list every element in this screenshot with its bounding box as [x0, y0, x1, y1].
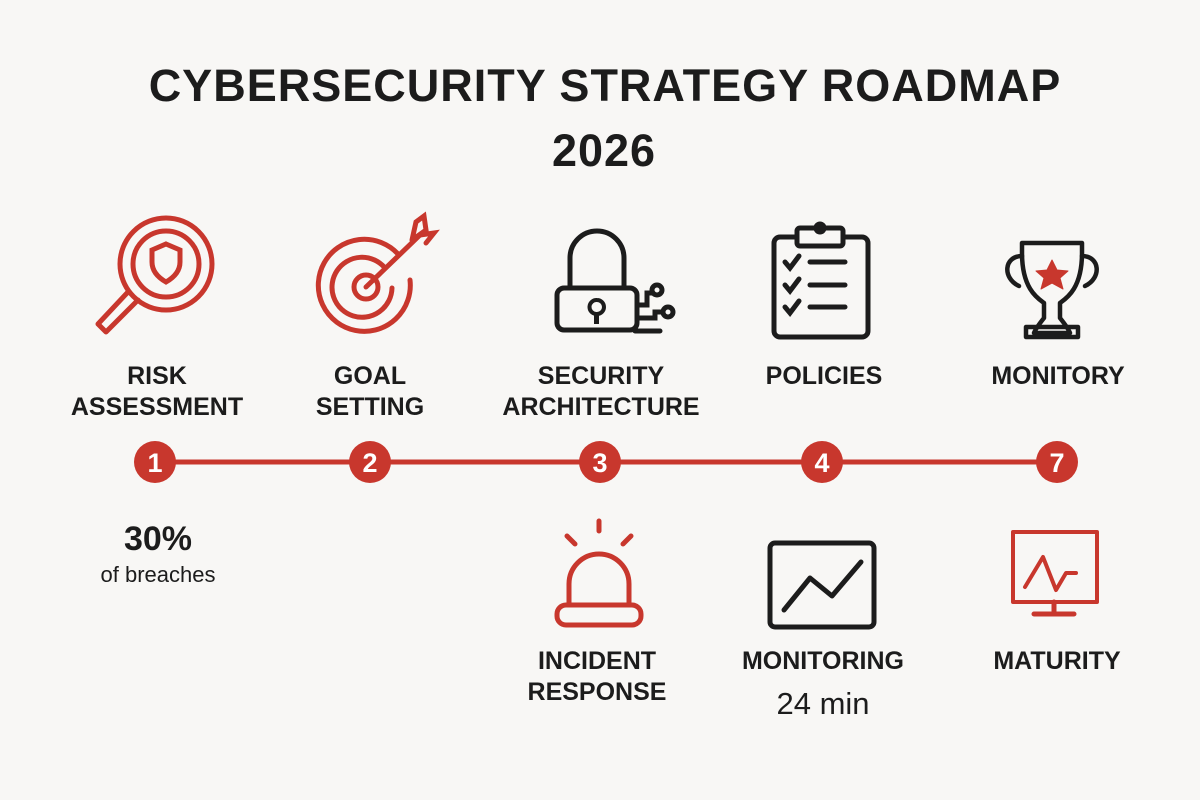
- top labels: ASSESSMENT: [71, 393, 243, 421]
- top labels: ARCHITECTURE: [502, 393, 700, 421]
- top labels: [71, 362, 1125, 421]
- bottom labels: INCIDENT: [538, 647, 656, 675]
- icon: line chart: [770, 543, 874, 627]
- stat: 30% of breaches: 30%: [124, 520, 192, 558]
- bottom labels: [528, 647, 1121, 706]
- icon: magnifier shield: [98, 218, 212, 332]
- timeline: 1: [147, 448, 163, 478]
- bottom labels: MONITORING: [742, 647, 904, 675]
- timeline: 4: [814, 448, 830, 478]
- bottom labels: MATURITY: [993, 647, 1121, 675]
- stat: 30% of breaches: of breaches: [101, 562, 215, 587]
- top labels: SECURITY: [538, 362, 665, 390]
- title: CYBERSECURITY STRATEGY ROADMAP: [149, 60, 1061, 111]
- top labels: RISK: [127, 362, 187, 390]
- icon: clipboard checklist: [774, 224, 868, 337]
- timeline: 7: [1049, 448, 1065, 478]
- icon: lock with circuit: [557, 231, 673, 331]
- top labels: MONITORY: [991, 362, 1125, 390]
- stat: 24 min: 24 min: [776, 686, 870, 721]
- timeline: [134, 441, 1078, 483]
- icon: monitor: [1013, 532, 1097, 614]
- icon: trophy: [1007, 243, 1097, 337]
- bottom labels: RESPONSE: [528, 678, 666, 706]
- title: [149, 60, 1061, 176]
- title: 2026: [552, 125, 656, 176]
- top labels: SETTING: [316, 393, 424, 421]
- top labels: POLICIES: [766, 362, 882, 390]
- icon: target: [318, 216, 434, 331]
- timeline: 3: [592, 448, 608, 478]
- icon: alarm: [557, 521, 641, 625]
- timeline: 2: [362, 448, 378, 478]
- top labels: GOAL: [334, 362, 406, 390]
- stat: 30% of breaches: [101, 520, 215, 587]
